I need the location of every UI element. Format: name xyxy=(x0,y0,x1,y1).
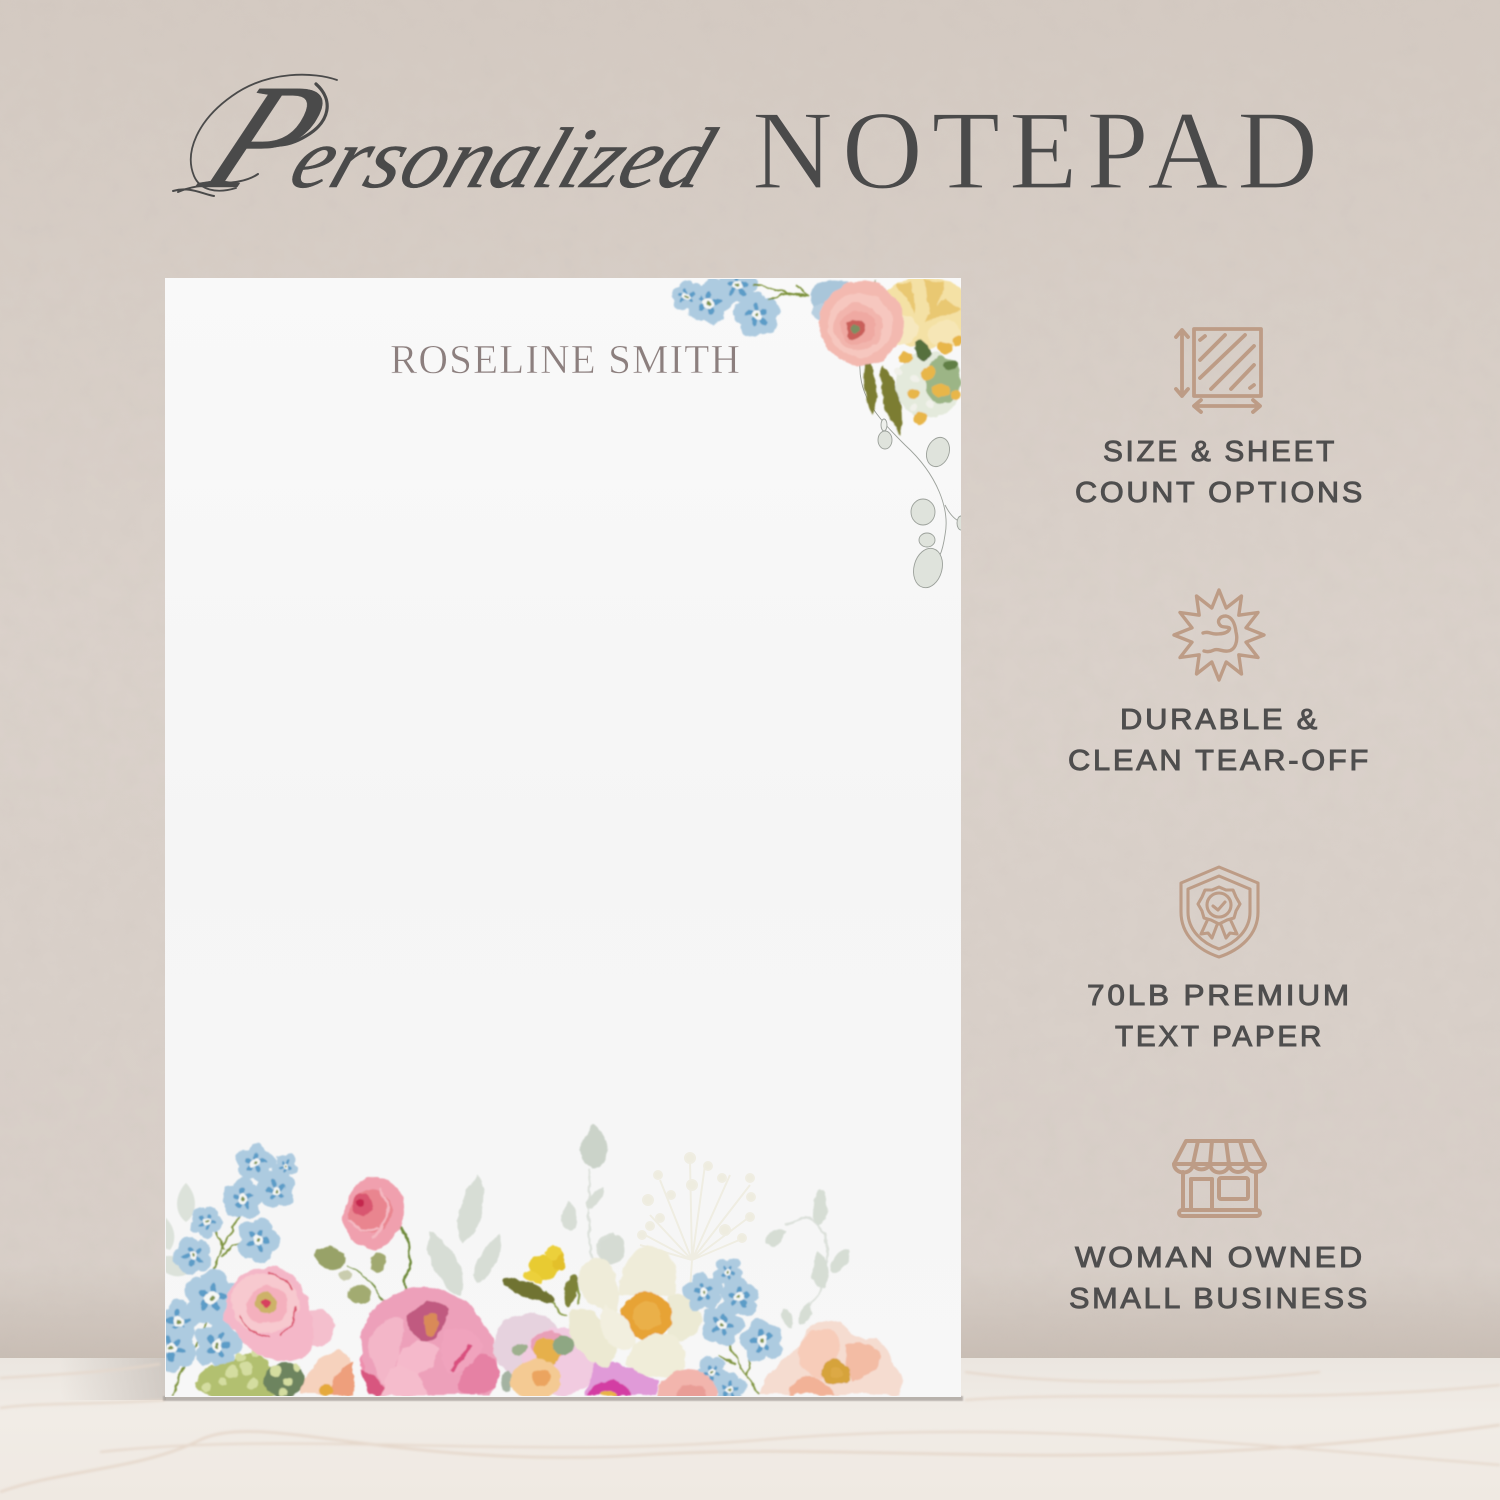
pink ranunculus xyxy=(820,281,904,365)
label: COUNT OPTIONS xyxy=(1075,477,1365,509)
yellow dahlia xyxy=(886,279,961,350)
script capital: P xyxy=(179,55,352,220)
peach rose xyxy=(300,1350,354,1396)
notepad name: ROSELINE SMITH xyxy=(390,336,740,382)
blue stems xyxy=(172,1218,760,1395)
decorative swash of the script capital P xyxy=(173,75,337,196)
sage eucalyptus: center xyxy=(418,1125,621,1301)
feature: size and sheet count xyxy=(1075,329,1365,509)
label: CLEAN TEAR-OFF xyxy=(1068,745,1371,777)
feature: woman owned small business xyxy=(1069,1141,1370,1315)
sage eucalyptus: right xyxy=(762,1189,854,1330)
icon: storefront xyxy=(1174,1141,1265,1216)
green hydrangea xyxy=(194,1350,306,1396)
notepad shadow xyxy=(163,1396,963,1401)
hydrangea cluster xyxy=(894,334,964,424)
pink peony xyxy=(360,1287,500,1395)
floral corner: top right xyxy=(669,265,971,591)
forget-me-nots: left cluster xyxy=(166,1142,299,1374)
marble surface xyxy=(0,1358,1500,1500)
feature: 70lb premium text paper xyxy=(1087,867,1352,1053)
coral ranunculus xyxy=(656,1368,718,1396)
lilac peony with orange rose xyxy=(493,1313,598,1401)
forget-me-nots: right cluster xyxy=(682,1258,784,1396)
icon: shield with rosette xyxy=(1181,867,1258,957)
label: SMALL BUSINESS xyxy=(1069,1283,1370,1315)
label: SIZE & SHEET xyxy=(1103,436,1337,468)
magenta petals xyxy=(584,1360,660,1396)
sage leaves: left xyxy=(166,1183,196,1276)
rose stem and olive sprig xyxy=(347,1225,409,1303)
dill umbel xyxy=(638,1153,755,1290)
notepad sheet xyxy=(165,278,961,1397)
white camellia xyxy=(568,1236,702,1376)
blue blossoms behind rose xyxy=(810,280,849,308)
title: Personalized NOTEPAD xyxy=(173,55,1318,220)
forget-me-nots xyxy=(671,279,782,338)
feature: durable clean tear-off xyxy=(1068,590,1371,777)
icon: size square with arrows xyxy=(1176,329,1261,412)
label: WOMAN OWNED xyxy=(1075,1242,1365,1274)
olive leaves xyxy=(311,1243,388,1305)
pink ranunculus: left xyxy=(225,1267,335,1362)
label: TEXT PAPER xyxy=(1115,1021,1324,1053)
outlined eucalyptus sprig xyxy=(860,362,965,591)
label: 70LB PREMIUM xyxy=(1087,980,1352,1012)
stems xyxy=(752,283,808,300)
rose: red-pink bud xyxy=(344,1177,404,1248)
label: DURABLE & xyxy=(1120,704,1320,736)
peach peony xyxy=(760,1320,902,1395)
icon: starburst with flexed arm xyxy=(1174,590,1264,680)
olive leaves xyxy=(862,362,879,416)
script word: ersonalized xyxy=(279,111,726,206)
serif word: NOTEPAD xyxy=(752,89,1318,213)
yellow buttercup xyxy=(499,1247,580,1316)
floral border: bottom xyxy=(166,1124,904,1396)
